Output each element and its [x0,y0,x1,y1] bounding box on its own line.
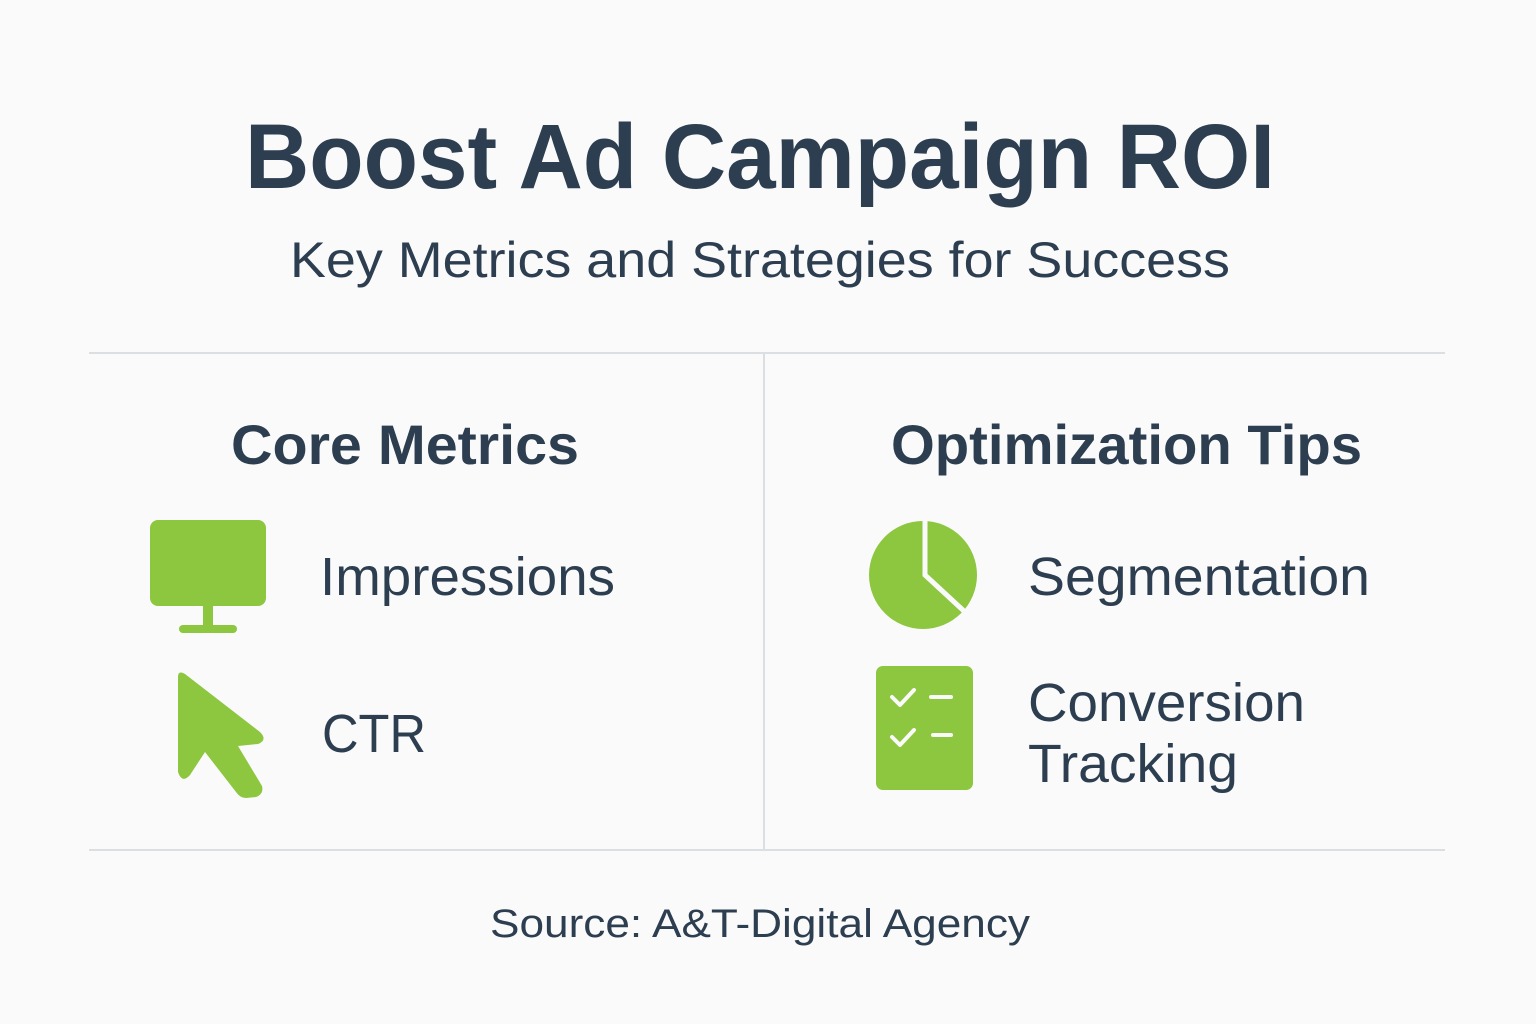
icon: checklist [876,666,973,790]
label: conversion tracking [1028,673,1305,794]
heading: core metrics: Core Metrics [231,413,579,476]
panel: optimization tips [869,413,1370,794]
subtitle: Key Metrics and Strategies for Success [290,232,1230,288]
label: impressions: Impressions [320,547,615,607]
icon: cursor [178,673,264,798]
heading: optimization tips: Optimization Tips [891,413,1362,476]
panel: core metrics [150,413,615,798]
label: segmentation: Segmentation [1028,547,1370,607]
label: conversion tracking: Tracking [1028,734,1238,794]
source: Source: A&T-Digital Agency [490,902,1030,946]
label: CTR: CTR [322,704,426,764]
icon: monitor [150,520,266,633]
icon: pie chart [869,521,977,629]
title: Boost Ad Campaign ROI [245,106,1275,208]
label: conversion tracking: Conversion [1028,673,1305,733]
